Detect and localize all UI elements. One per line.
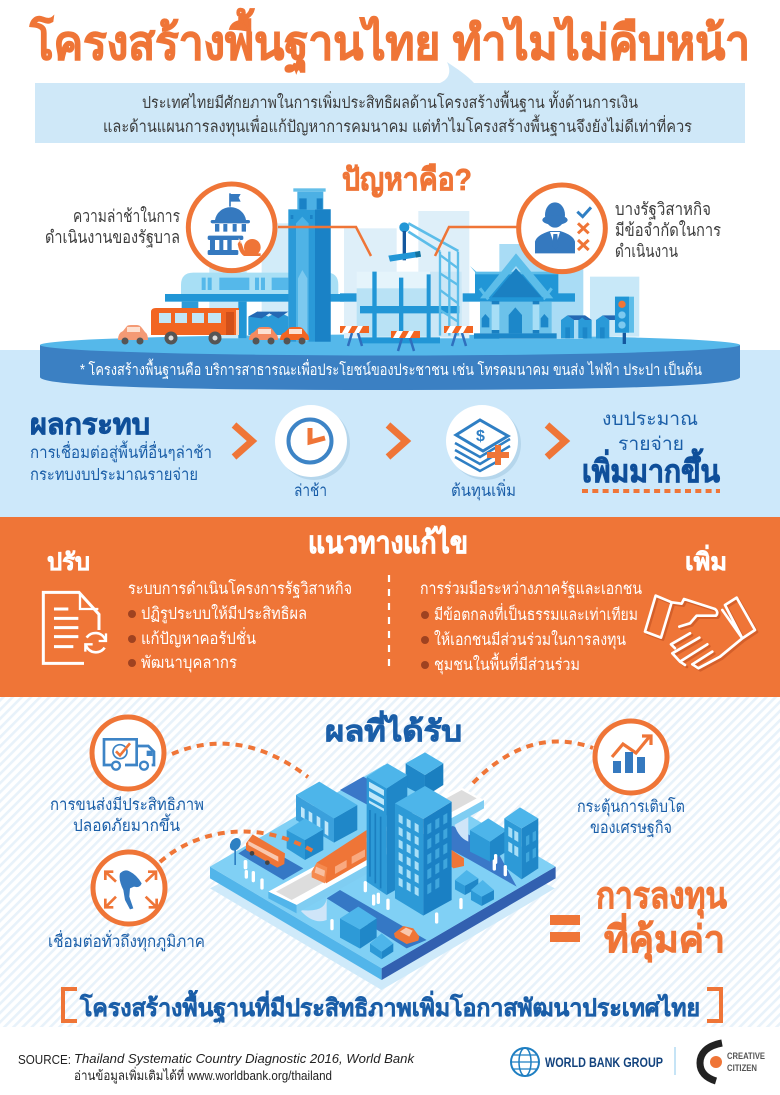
vehicles and barriers xyxy=(118,308,473,351)
houses xyxy=(561,315,615,338)
elevated road xyxy=(268,787,484,913)
problem text right xyxy=(615,199,721,261)
problem text right: ดำเนินงาน xyxy=(615,241,678,261)
houses left xyxy=(248,312,288,335)
tower xyxy=(288,188,331,342)
train xyxy=(312,830,367,883)
traffic light xyxy=(615,297,634,344)
snail xyxy=(238,239,261,256)
right column: ชุมชนในพื้นที่มีส่วนร่วม xyxy=(434,652,580,675)
right column: ให้เอกชนมีส่วนร่วมในการลงทุน xyxy=(434,630,626,650)
results heading: ผลที่ได้รับ xyxy=(325,710,462,748)
benefit: transport: ปลอดภัยมากขึ้น xyxy=(73,813,180,835)
impact text: กระทบงบประมาณรายจ่าย xyxy=(30,466,198,484)
benefit: economic growth: กระตุ้นการเติบโต xyxy=(577,797,685,817)
arrows xyxy=(234,425,565,457)
result: budget increases: เพิ่มมากขึ้น xyxy=(582,448,720,489)
add heading: เพิ่ม xyxy=(685,544,727,576)
icon: handshake xyxy=(645,596,757,670)
right column xyxy=(420,580,642,675)
result: budget increases: งบประมาณ xyxy=(602,408,698,429)
right cube xyxy=(470,818,507,862)
label: delay: ล่าช้า xyxy=(294,482,327,500)
benefit: transport: การขนส่งมีประสิทธิภาพ xyxy=(50,796,204,814)
people xyxy=(244,854,507,930)
temple xyxy=(470,253,558,339)
icon: cost increase: $ xyxy=(476,428,485,445)
temple and houses xyxy=(463,244,639,344)
divider xyxy=(674,1047,676,1075)
equals worthwhile investment: ที่คุ้มค่า xyxy=(604,913,725,963)
source: Thailand Systematic Country Diagnostic 2016, World Bank xyxy=(74,1051,416,1066)
logo: Creative Citizen xyxy=(700,1043,765,1081)
car behind tower xyxy=(452,850,464,868)
tall tower xyxy=(367,763,407,895)
title: โครงสร้างพื้นฐานไทย ทำไมไม่คืบหน้า xyxy=(29,8,750,74)
impact text xyxy=(30,409,212,484)
intro callout: ประเทศไทยมีศักยภาพในการเพิ่มประสิทธิผลด้านโครงสร้างพื้นฐาน ทั้งด้านการเงิน xyxy=(142,90,638,112)
small cubes xyxy=(340,870,494,959)
car 1 xyxy=(118,325,148,344)
car 2 xyxy=(249,327,278,344)
isometric city xyxy=(210,752,556,990)
orange car xyxy=(394,926,419,944)
right tower xyxy=(504,807,538,879)
benefit: economic growth xyxy=(577,721,685,837)
left column: พัฒนาบุคลากร xyxy=(141,654,237,673)
equals worthwhile investment xyxy=(550,875,727,963)
problem text left: ความล่าช้าในการ xyxy=(73,206,180,226)
logo: Creative Citizen: CITIZEN xyxy=(727,1063,757,1073)
car 3 xyxy=(280,327,309,344)
left column: ระบบการดำเนินโครงการรัฐวิสาหกิจ xyxy=(128,579,352,598)
right column: การร่วมมือระหว่างภาครัฐและเอกชน xyxy=(420,580,642,598)
problem heading: ปัญหาคือ? xyxy=(342,162,472,198)
circle icon: state enterprise xyxy=(519,185,605,272)
problem text right: บางรัฐวิสาหกิจ xyxy=(615,199,711,220)
bus stop xyxy=(228,836,243,865)
low building xyxy=(296,782,357,843)
logo: Creative Citizen: CREATIVE xyxy=(727,1051,765,1061)
left column xyxy=(128,579,352,673)
footer white strip xyxy=(0,1027,780,1095)
right column: มีข้อตกลงที่เป็นธรรมและเท่าเทียม xyxy=(434,603,638,624)
label: cost increase: ต้นทุนเพิ่ม xyxy=(451,479,516,501)
connector lines xyxy=(278,227,518,256)
left column: ปฏิรูประบบให้มีประสิทธิผล xyxy=(141,604,307,624)
icon: document refresh xyxy=(43,592,106,663)
source xyxy=(18,1051,416,1084)
source: SOURCE: xyxy=(18,1052,71,1067)
source: อ่านข้อมูลเพิ่มเติมได้ที่ www.worldbank.org/thailand xyxy=(74,1067,332,1084)
front tower xyxy=(395,786,452,916)
barriers xyxy=(340,326,473,351)
benefit: connectivity xyxy=(48,852,205,952)
impact panel background xyxy=(0,350,780,517)
adjust heading: ปรับ xyxy=(47,549,90,576)
benefit: connectivity: เชื่อมต่อทั่วถึงทุกภูมิภาค xyxy=(48,930,205,952)
logo: World Bank Group: WORLD BANK GROUP xyxy=(545,1055,663,1070)
problem text left: ดำเนินงานของรัฐบาล xyxy=(45,227,180,248)
construction site xyxy=(340,211,469,343)
left scene: train and tower xyxy=(165,188,350,342)
divider xyxy=(388,575,390,673)
crane xyxy=(388,222,458,336)
back cube xyxy=(406,752,443,797)
result: budget increases: รายจ่าย xyxy=(618,433,684,454)
benefit: transport xyxy=(50,717,204,835)
problem text right: มีข้อจำกัดในการ xyxy=(615,220,721,240)
small cube xyxy=(287,818,323,860)
bus xyxy=(151,308,239,344)
dotted connectors xyxy=(160,741,593,862)
intro callout xyxy=(35,62,745,143)
circle icon: government xyxy=(188,184,275,271)
result: budget increases xyxy=(582,408,720,491)
equals worthwhile investment: การลงทุน xyxy=(596,875,727,919)
logo: World Bank Group xyxy=(511,1048,663,1076)
icon: delay clock xyxy=(275,405,350,480)
panel: results background xyxy=(0,697,780,1027)
icon: cost increase xyxy=(446,405,521,480)
problem text left xyxy=(45,206,180,248)
infrastructure city scene xyxy=(165,188,639,344)
left column: แก้ปัญหาคอรัปชั่น xyxy=(141,627,256,648)
bus xyxy=(246,834,285,868)
platform xyxy=(40,334,740,390)
conclusion banner: โครงสร้างพื้นฐานที่มีประสิทธิภาพเพิ่มโอกาสพัฒนาประเทศไทย xyxy=(79,989,700,1024)
impact text: การเชื่อมต่อสู่พื้นที่อื่นๆล่าช้า xyxy=(30,440,212,463)
panel: solutions xyxy=(0,517,780,697)
solutions heading: แนวทางแก้ไข xyxy=(308,525,468,560)
intro callout: และด้านแผนการลงทุนเพื่อแก้ปัญหาการคมนาคม แต่ทำไมโครงสร้างพื้นฐานจึงยังไม่ดีเท่าที่ควร xyxy=(103,114,692,137)
benefit: economic growth: ของเศรษฐกิจ xyxy=(590,819,672,837)
impact text: ผลกระทบ xyxy=(30,409,150,441)
